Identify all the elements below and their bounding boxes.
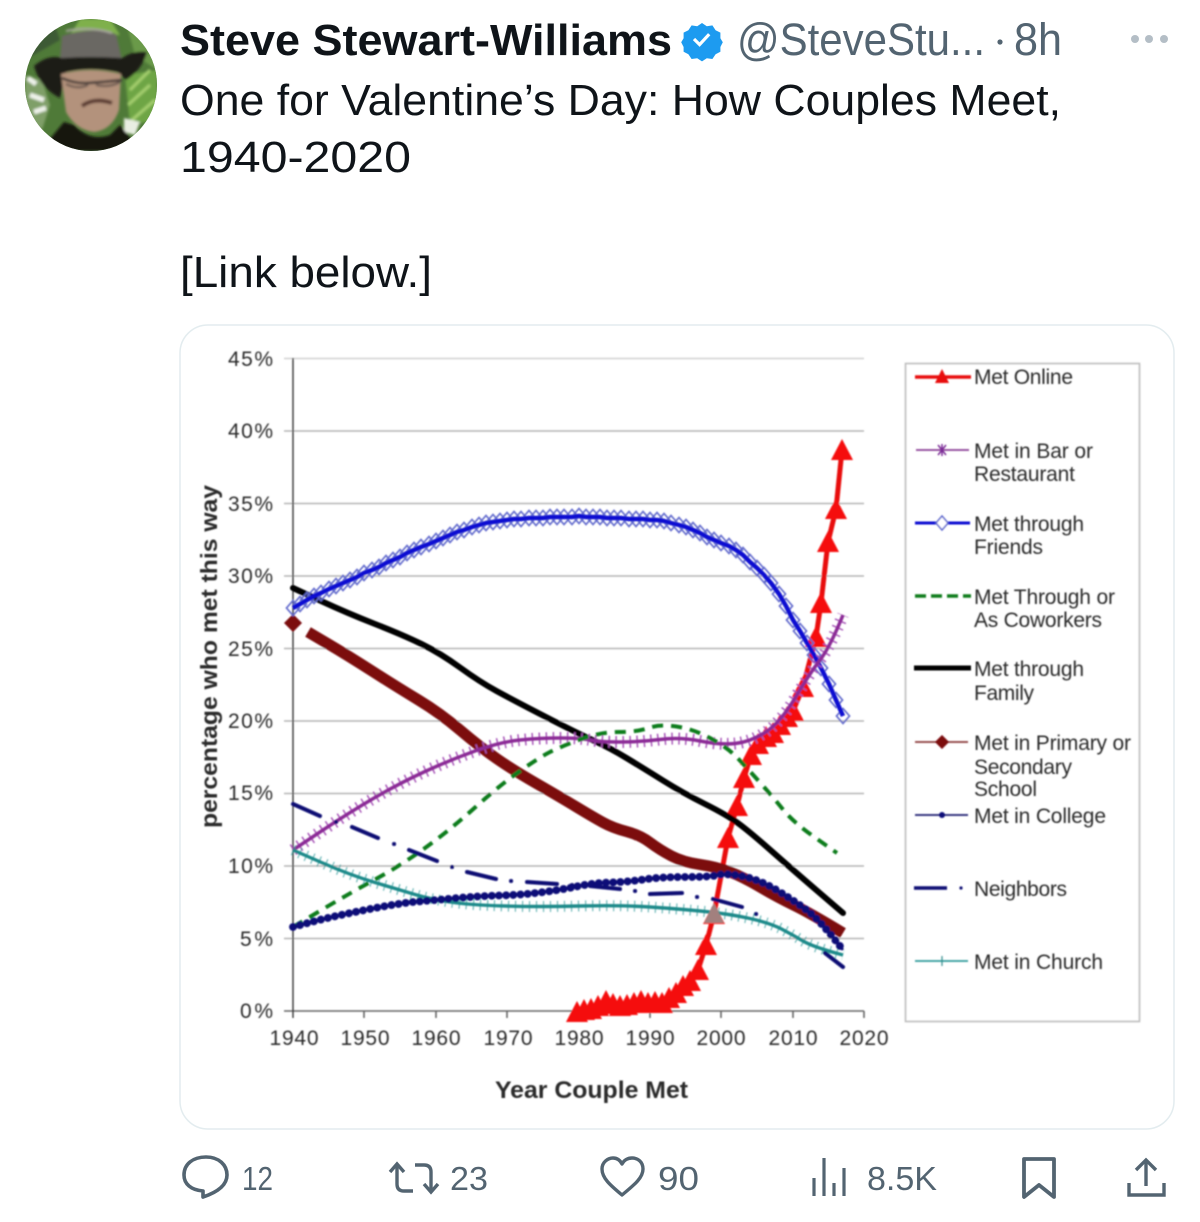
series: met through family: [293, 588, 843, 913]
y-axis labels: 40%: [228, 420, 273, 443]
legend: met in church: Met in Church: [974, 951, 1103, 974]
series: neighbors: [293, 804, 843, 967]
legend: met online: [915, 366, 1073, 389]
y-axis labels: [228, 348, 273, 1023]
y-axis labels: 15%: [228, 782, 273, 805]
action: reply: [184, 1157, 273, 1197]
line chart: [196, 348, 1140, 1104]
x-axis labels: 1970: [484, 1027, 532, 1050]
y-axis labels: 25%: [228, 638, 273, 661]
legend: met through friends: Met through: [974, 513, 1084, 536]
series: met in bar or restaurant: [293, 615, 843, 850]
action: repost: [390, 1160, 488, 1197]
y-axis title: percentage who met this way: [196, 485, 222, 828]
series: met through or as coworkers: [293, 726, 837, 927]
tweet text: [Link below.]: [180, 248, 432, 297]
action: bookmark: [1024, 1159, 1054, 1197]
x-axis labels: 2010: [768, 1027, 818, 1050]
legend: met in primary or secondary school: Secondary: [974, 756, 1072, 779]
tweet text: One for Valentine’s Day: How Couples Meet,: [180, 76, 1061, 125]
x-axis labels: 1960: [412, 1027, 460, 1050]
action: share: [1129, 1160, 1164, 1195]
x-axis labels: [270, 1027, 888, 1050]
legend: met through or as coworkers: As Coworkers: [974, 609, 1102, 632]
x-axis labels: 1980: [554, 1027, 604, 1050]
legend: [906, 364, 1140, 1022]
series: met in church: [293, 850, 843, 955]
action: like: 90: [658, 1160, 699, 1197]
x-axis labels: 1950: [340, 1027, 390, 1050]
legend: met in bar or restaurant: [916, 440, 1093, 486]
legend: met through family: Family: [974, 682, 1034, 705]
panel: media card: [180, 325, 1174, 1129]
legend: met through friends: [915, 513, 1084, 559]
legend: met through family: [914, 658, 1084, 705]
icon: verified badge: [681, 23, 723, 61]
y-axis labels: 5%: [240, 928, 273, 951]
legend: met in college: Met in College: [974, 805, 1106, 828]
legend: met in bar or restaurant: Met in Bar or: [974, 440, 1093, 463]
icon: more menu: [1131, 35, 1168, 43]
action: repost: 23: [450, 1160, 488, 1197]
legend: met in primary or secondary school: School: [974, 778, 1037, 801]
legend: met through family: Met through: [974, 658, 1084, 681]
x-axis labels: 2020: [840, 1027, 888, 1050]
y-axis labels: 45%: [228, 348, 273, 371]
x-axis title: Year Couple Met: [495, 1077, 688, 1104]
y-axis labels: 20%: [228, 710, 273, 733]
legend: met through or as coworkers: [915, 586, 1115, 632]
legend: neighbors: Neighbors: [974, 878, 1067, 901]
y-axis labels: 10%: [228, 855, 273, 878]
y-axis labels: 0%: [240, 1000, 273, 1023]
tweet text: 1940-2020: [180, 133, 411, 182]
legend: met in primary or secondary school: [915, 732, 1131, 801]
author name: Steve Stewart-Williams: [180, 16, 672, 65]
series: met online: [577, 450, 842, 1012]
action: reply: 12: [242, 1160, 273, 1197]
legend: met in bar or restaurant: Restaurant: [974, 463, 1075, 486]
series: met in primary or secondary school: [284, 614, 843, 933]
x-axis labels: 1940: [270, 1027, 318, 1050]
y-axis labels: 35%: [228, 493, 273, 516]
y-axis labels: 30%: [228, 565, 273, 588]
marker: muted online point: [704, 903, 724, 923]
series: met in college: [293, 874, 843, 950]
handle and time: 8h: [1014, 14, 1062, 65]
legend: neighbors: [914, 878, 1067, 901]
action: views: 8.5K: [867, 1160, 937, 1197]
legend: met through friends: Friends: [974, 536, 1043, 559]
gridlines: [284, 358, 864, 1018]
legend: met online: Met Online: [974, 366, 1073, 389]
tweet text: [180, 76, 1061, 297]
series: met through friends: [293, 516, 843, 716]
legend: met in college: [915, 805, 1106, 828]
handle and time: @SteveStu...: [737, 14, 985, 65]
x-axis labels: 1990: [626, 1027, 674, 1050]
legend: met in primary or secondary school: Met in Primary or: [974, 732, 1131, 755]
x-axis labels: 2000: [696, 1027, 746, 1050]
legend: met through or as coworkers: Met Through or: [974, 586, 1115, 609]
action: like: [602, 1158, 699, 1197]
action: views: [814, 1158, 937, 1197]
avatar: [25, 19, 157, 151]
